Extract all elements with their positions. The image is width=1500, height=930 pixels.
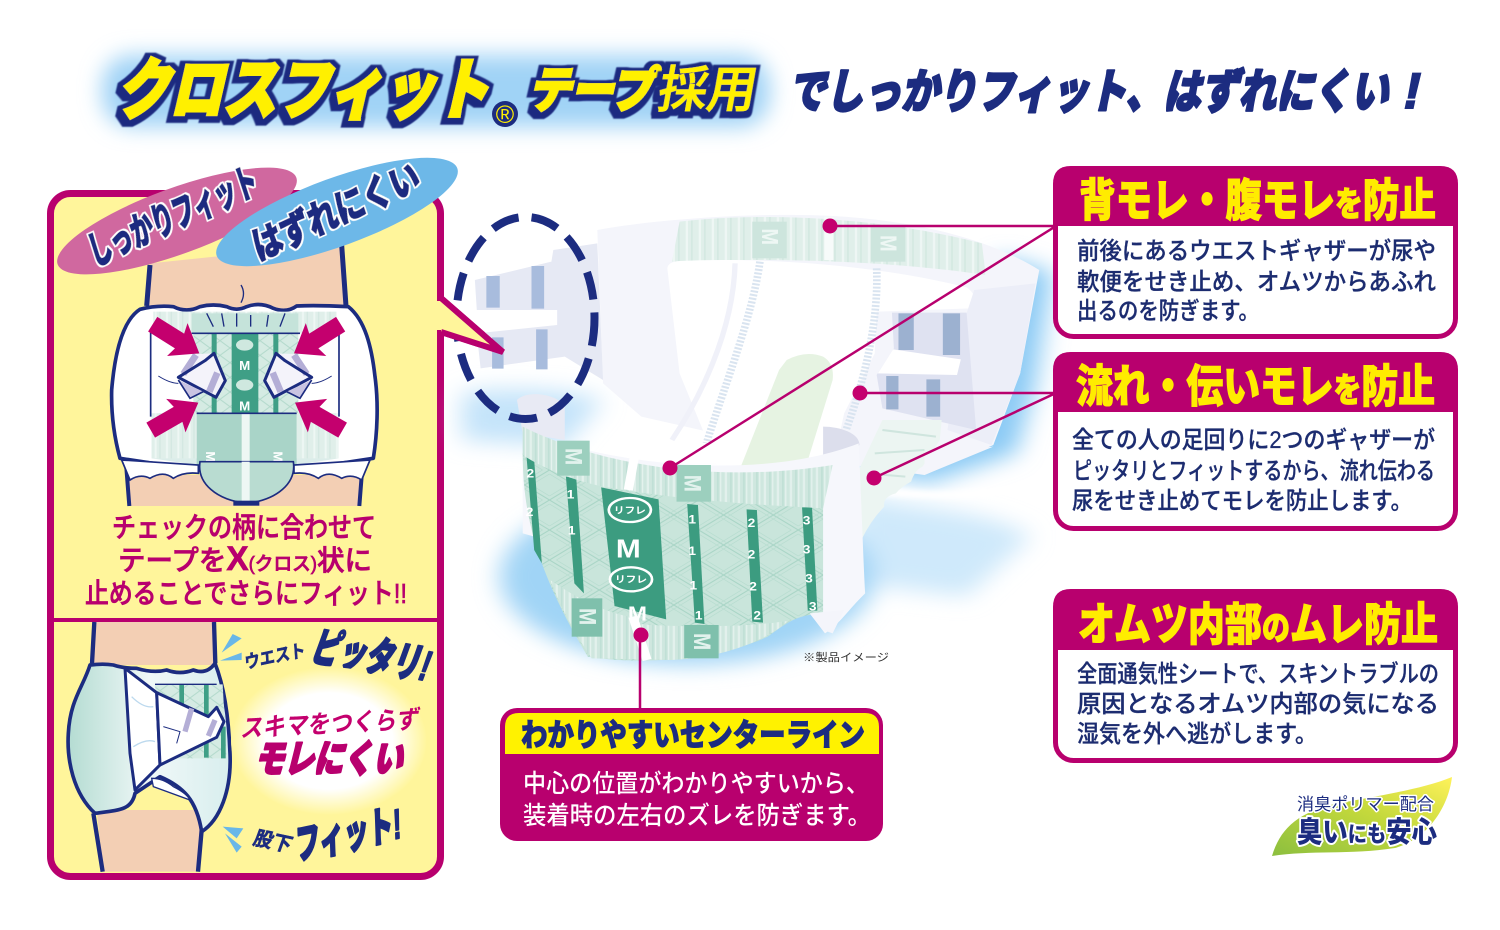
logos and sizes: M	[239, 358, 250, 373]
size numbers: 3	[803, 543, 810, 556]
leader dots	[634, 218, 882, 642]
callout: center line: 装着時の左右のズレを防ぎます。	[523, 802, 871, 830]
front white body	[523, 430, 865, 633]
badge: hard to slip: はずれにくい	[247, 155, 425, 270]
size numbers: 2	[527, 467, 534, 480]
pointer tip over circle	[441, 298, 503, 352]
product illustration: diaper: M	[689, 633, 715, 650]
torso skin	[147, 243, 346, 310]
back M marks: M	[757, 228, 782, 245]
M marks: M	[203, 451, 217, 462]
product illustration: diaper: リフレ	[615, 574, 647, 585]
leader: center line	[639, 635, 641, 710]
box: inner humidity: 原因となるオムツ内部の気になる	[1077, 691, 1439, 718]
box: inner humidity	[1053, 589, 1458, 760]
crotch text large: フィット!	[295, 800, 402, 869]
waist text small: ウエスト	[244, 640, 306, 673]
leader: waist gathers	[670, 226, 1056, 468]
box: back and belly leak: 出るのを防ぎます。	[1077, 298, 1259, 325]
gathers	[706, 262, 877, 443]
white glow	[231, 667, 427, 815]
leg frill side	[152, 778, 190, 800]
front inner left	[517, 394, 565, 440]
product illustration: diaper: M	[574, 608, 601, 625]
white crescent in glow	[867, 472, 1050, 499]
odor relief text: 臭いにも安心	[1297, 816, 1437, 849]
note: product image: ※製品イメージ	[803, 650, 889, 664]
dashed circle highlight	[456, 217, 594, 419]
panel frame	[50, 194, 440, 876]
bottom right tail	[924, 447, 993, 475]
size numbers: 1	[695, 608, 703, 622]
check band	[193, 333, 298, 413]
size numbers: 2	[753, 608, 761, 622]
right tape slot	[878, 349, 961, 375]
box: flow leak	[1053, 352, 1458, 528]
right side panel	[947, 283, 1035, 445]
front check panel	[523, 453, 823, 661]
logos	[609, 498, 652, 591]
box: back and belly leak: 背モレ・腹モレを防止	[1079, 175, 1436, 226]
right tape	[877, 313, 976, 430]
size numbers: 1	[688, 513, 696, 526]
accent darts bottom	[223, 827, 243, 853]
back waist band	[672, 217, 986, 275]
crotch text small: 股下	[250, 827, 295, 857]
title: right part: !	[1399, 63, 1427, 119]
size numbers: 1	[688, 544, 696, 558]
title: tape adopted: テープ	[525, 65, 663, 118]
diaper body	[112, 305, 377, 470]
leak message: モレにくい	[252, 739, 410, 781]
title: cross fit: クロスフィット	[113, 54, 502, 128]
box: back and belly leak: 軟便をせき止め、オムツからあふれ	[1077, 269, 1436, 296]
leaf	[1272, 777, 1452, 856]
back panel	[597, 215, 1039, 475]
center strip	[232, 333, 258, 413]
leg frill bottom	[810, 610, 844, 633]
box: flow leak: 全ての人の足回りに2つのギャザーが	[1072, 427, 1435, 454]
diaper side	[68, 663, 230, 832]
callout pointer	[441, 298, 503, 352]
back M marks	[757, 228, 901, 252]
size M marks: M	[628, 603, 647, 625]
size numbers: 3	[805, 572, 813, 585]
check band side	[155, 684, 227, 758]
size numbers: 1	[690, 578, 697, 592]
back M marks: M	[875, 235, 901, 252]
illustration: side view wearing diaper	[68, 622, 243, 872]
box: flow leak: 流れ・伝いモレを防止	[1076, 361, 1435, 412]
badge: odor	[1272, 777, 1452, 856]
accent darts top	[220, 634, 242, 661]
size numbers: 1	[568, 523, 576, 537]
logos and sizes	[236, 339, 253, 414]
waist text large: ピッタリ!	[306, 624, 438, 689]
bottom band	[550, 580, 789, 660]
badge: firm fit: しっかりフィット	[84, 161, 263, 275]
tape side	[157, 693, 224, 765]
panel divider	[52, 618, 439, 622]
badge: firm fit	[46, 147, 308, 295]
M marks	[203, 451, 284, 462]
title: adopted kanji: 採用	[654, 61, 762, 118]
box: flow leak: 尿をせき止めてモレを防止します。	[1072, 488, 1412, 515]
title: registered mark: ®	[496, 101, 515, 129]
tape right	[265, 353, 332, 398]
instruction text: チェックの柄に合わせて	[112, 512, 376, 543]
waist wing	[125, 668, 160, 790]
panel: fit explanation	[46, 136, 503, 877]
product illustration: diaper	[461, 215, 1053, 665]
size numbers: 2	[749, 579, 757, 593]
leg skin	[97, 810, 200, 872]
instruction text: 止めることでさらにフィット!!	[85, 578, 407, 609]
odor polymer text: 消臭ポリマー配合	[1297, 795, 1434, 814]
tape left	[158, 353, 225, 398]
M marks: M	[270, 451, 284, 462]
illustration: front view wearing diaper	[112, 243, 377, 506]
leg gather right	[856, 420, 942, 540]
box: inner humidity: オムツ内部のムレ防止	[1078, 599, 1438, 650]
gap message: スキマをつくらず	[239, 706, 422, 743]
logos and sizes: M	[239, 399, 250, 414]
leader lines	[640, 226, 1056, 710]
leg frills	[122, 460, 198, 480]
green absorber	[741, 354, 833, 467]
panel lines	[151, 330, 339, 417]
instruction text: テープをX(クロス)状に	[118, 540, 372, 578]
thigh skin	[127, 475, 361, 506]
instruction text	[85, 512, 407, 609]
top front band	[523, 427, 833, 508]
arrows	[141, 308, 352, 447]
diaper lower green panel	[152, 413, 338, 465]
waist skin	[91, 622, 215, 665]
box: inner humidity: 湿気を外へ逃がします。	[1077, 721, 1317, 748]
size numbers	[526, 467, 817, 622]
size numbers: 2	[526, 505, 533, 519]
front inner right	[823, 427, 859, 467]
callout: center line	[500, 708, 883, 841]
blue glow	[461, 257, 1053, 665]
title	[113, 54, 1427, 129]
product illustration: diaper: M	[679, 475, 706, 492]
size M marks	[616, 534, 647, 625]
title glow	[102, 55, 770, 127]
green strips	[527, 457, 817, 624]
box: back and belly leak: 前後にあるウエストギャザーが尿や	[1077, 238, 1436, 265]
box: inner humidity: 全面通気性シートで、スキントラブルの	[1077, 660, 1439, 688]
diaper upper green panel	[153, 312, 337, 333]
box: back and belly leak	[1053, 166, 1458, 336]
size numbers: 3	[803, 513, 810, 527]
left tape	[475, 243, 603, 380]
product illustration: diaper: リフレ	[614, 505, 646, 516]
inner pad	[667, 260, 974, 467]
callout: center line: 中心の位置がわかりやすいから、	[523, 770, 869, 798]
leader: leg gathers	[860, 393, 1056, 478]
size numbers: 2	[748, 516, 755, 530]
product illustration: diaper: M	[560, 448, 587, 465]
size M marks: M	[616, 534, 641, 563]
callout: center line: わかりやすいセンターライン	[521, 718, 865, 753]
size numbers: 1	[567, 487, 574, 501]
size numbers: 3	[809, 599, 817, 613]
size numbers: 2	[748, 547, 755, 561]
crotch	[200, 462, 294, 503]
